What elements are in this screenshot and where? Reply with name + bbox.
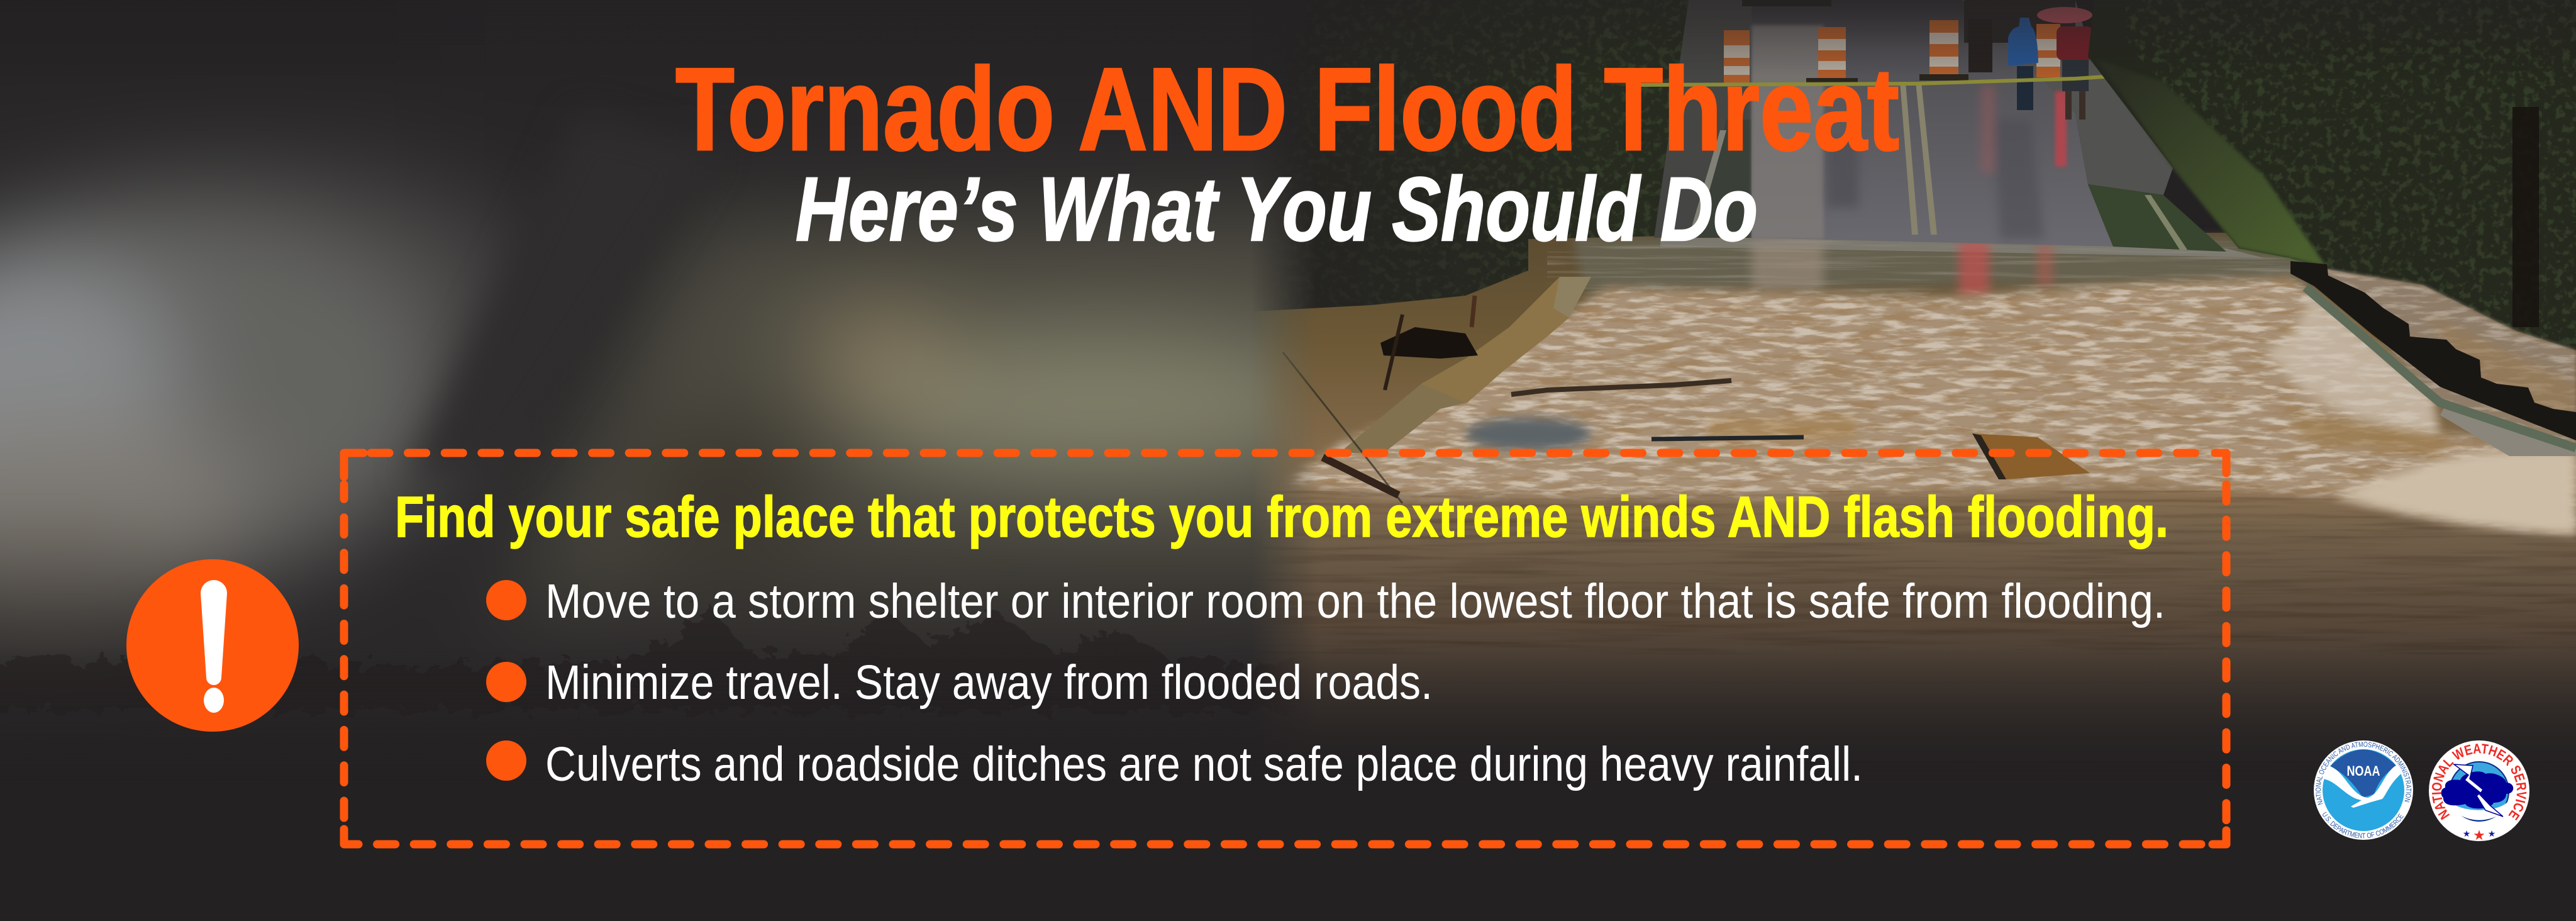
flood photo	[1195, 0, 2576, 761]
churning foam	[1289, 271, 2576, 537]
concrete spillway and left debris	[1283, 277, 2090, 503]
car, traffic cones, people and caution tape	[1635, 0, 2236, 120]
bright foam lobe at right	[2333, 450, 2576, 535]
title: Tornado AND Flood Threat	[675, 43, 1899, 175]
background: tornado and flooded road photo composite	[0, 0, 2576, 723]
ripples on lower brown water	[1258, 491, 2576, 654]
logo: NOAA: U.S. DEPARTMENT OF COMMERCE	[2323, 812, 2404, 838]
logo: NOAA: NOAA	[2347, 763, 2380, 779]
bullet 3: Culverts and roadside ditches are not safe place during heavy rainfall.	[545, 737, 1863, 791]
logo: National Weather Service: ★	[2463, 829, 2470, 839]
road shoulder and asphalt	[1654, 0, 2226, 252]
logo: National Weather Service: ★	[2473, 827, 2485, 843]
guardrail posts	[2290, 261, 2576, 440]
right tree canopy and green bank	[2088, 0, 2576, 359]
overlays	[0, 0, 2576, 75]
logo: National Weather Service: NATIONAL WEATHER SERVICE	[2431, 744, 2527, 820]
foam wave along guardrail	[2264, 287, 2438, 434]
icon: orange exclamation alert	[126, 559, 299, 732]
callout heading: Find your safe place that protects you from extreme winds AND flash flooding.	[395, 485, 2168, 549]
dashed callout box	[344, 453, 2226, 844]
tornado funnel	[409, 113, 717, 478]
logo: NOAA: NATIONAL OCEANIC AND ATMOSPHERIC ADMINISTRATION	[2316, 742, 2411, 805]
subtitle: Here’s What You Should Do	[796, 159, 1758, 260]
bullet 1: Move to a storm shelter or interior room on the lowest floor that is safe from flooding.	[545, 574, 2165, 628]
left canopy	[1259, 0, 1688, 311]
tornado storm clouds	[0, 0, 1446, 774]
guardrail beam	[2306, 287, 2576, 456]
calm water above the spillway	[1547, 236, 2314, 299]
bullet 2: Minimize travel. Stay away from flooded roads.	[545, 656, 1433, 710]
flood water base	[1262, 233, 2576, 725]
logo: NOAA	[2314, 740, 2413, 840]
logo: National Weather Service: ★	[2488, 829, 2496, 839]
distant tree line	[0, 604, 1321, 711]
water behind guardrail	[2264, 252, 2576, 466]
